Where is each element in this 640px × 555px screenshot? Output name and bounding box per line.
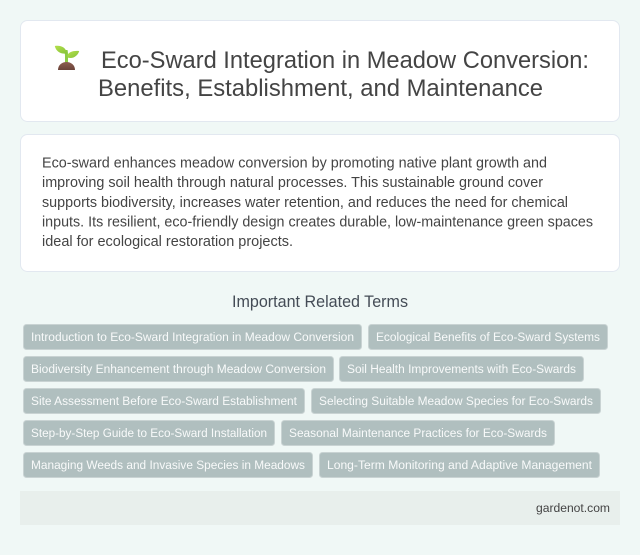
- chip: selecting species: [312, 388, 600, 414]
- icon: seedling: [55, 46, 79, 70]
- description text: inputs. Its resilient, eco-friendly design creates durable, low-maintenance green spaces: [42, 214, 593, 230]
- chip: long-term monitoring: Long-Term Monitoring and Adaptive Management: [327, 458, 593, 472]
- chip: introduction: Introduction to Eco-Sward Integration in Meadow Conversion: [31, 330, 354, 344]
- description text: improving soil health through natural processes. This sustainable ground cover: [42, 175, 543, 191]
- footer: [20, 491, 620, 525]
- chip: soil health: Soil Health Improvements with Eco-Swards: [347, 362, 576, 376]
- chip: installation guide: Step-by-Step Guide to Eco-Sward Installation: [31, 426, 267, 440]
- chip: ecological benefits: Ecological Benefits of Eco-Sward Systems: [376, 330, 600, 344]
- description text: ideal for ecological restoration projects.: [42, 234, 293, 250]
- chip: long-term monitoring: [320, 452, 600, 478]
- chip: installation guide: [24, 420, 274, 446]
- title text: Eco-Sward Integration in Meadow Conversion:: [101, 47, 589, 74]
- panel: title card: [20, 20, 620, 122]
- panel: description: [20, 134, 620, 272]
- heading: important related terms: Important Related Terms: [232, 293, 408, 311]
- title text: Benefits, Establishment, and Maintenance: [98, 75, 543, 102]
- panel: related term chips: [24, 324, 608, 478]
- chip: introduction: [24, 324, 362, 350]
- description text: Eco-sward enhances meadow conversion by promoting native plant growth and: [42, 156, 547, 172]
- chip: ecological benefits: [368, 324, 608, 350]
- footer: gardenot.com: [536, 501, 610, 515]
- title text: [98, 47, 589, 102]
- chip: selecting species: Selecting Suitable Meadow Species for Eco-Swards: [319, 394, 593, 408]
- chip: managing weeds: Managing Weeds and Invasive Species in Meadows: [31, 458, 305, 472]
- description text: [42, 156, 593, 250]
- chip: site assessment: Site Assessment Before Eco-Sward Establishment: [31, 394, 298, 408]
- chip: seasonal maintenance: [282, 420, 554, 446]
- chip: managing weeds: [24, 452, 312, 478]
- chip: seasonal maintenance: Seasonal Maintenance Practices for Eco-Swards: [289, 426, 547, 440]
- chip: biodiversity: [24, 356, 334, 382]
- chip: biodiversity: Biodiversity Enhancement through Meadow Conversion: [31, 362, 326, 376]
- chip: site assessment: [24, 388, 304, 414]
- chip: soil health: [340, 356, 584, 382]
- description text: supports biodiversity, increases water retention, and reduces the need for chemical: [42, 195, 568, 211]
